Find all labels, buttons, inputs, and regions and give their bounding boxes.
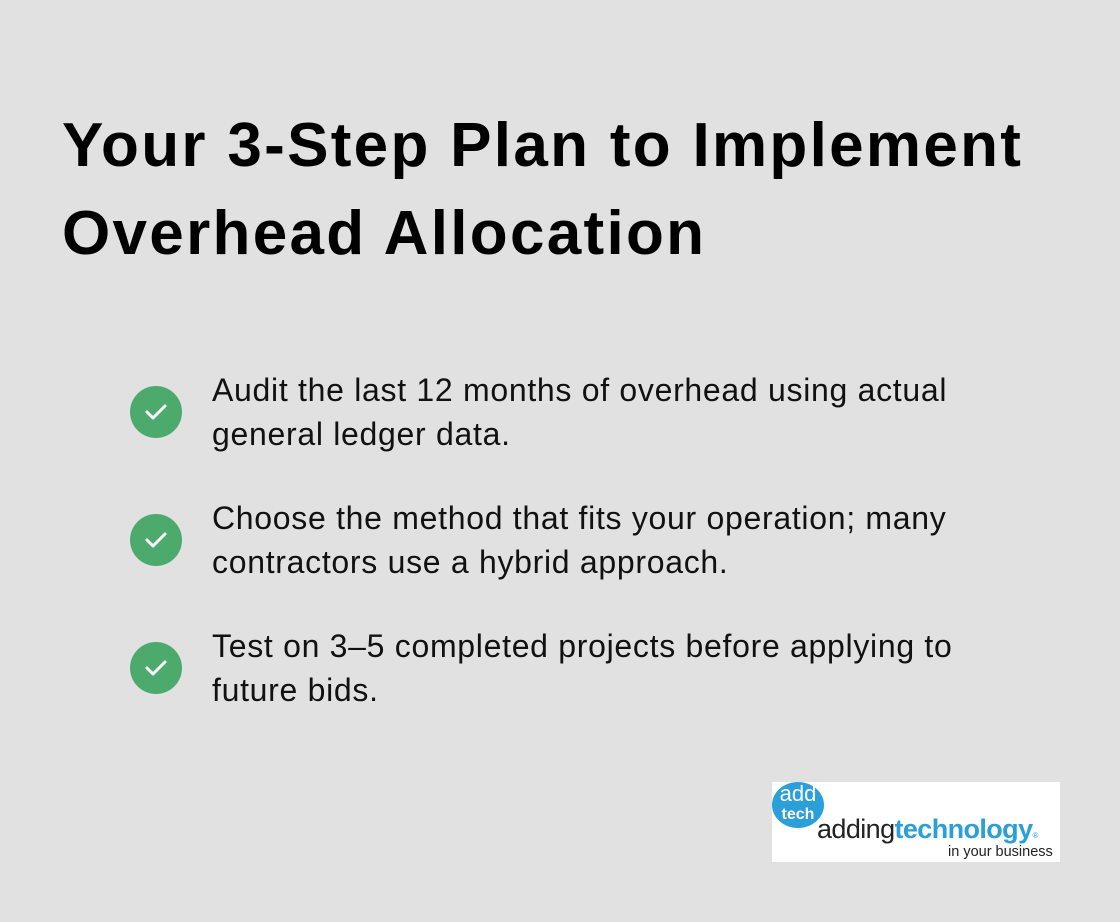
icon: check (130, 642, 182, 694)
item 1 (130, 372, 947, 452)
text 2: Choose the method that fits your operation; many (212, 500, 946, 536)
text 3 (212, 628, 953, 708)
text 2 (212, 500, 946, 580)
logo (772, 782, 1060, 862)
text 2: contractors use a hybrid approach. (212, 544, 729, 580)
item 2 (130, 500, 946, 580)
icon: check (130, 386, 182, 438)
title: Overhead Allocation (62, 199, 706, 268)
icon: check (130, 514, 182, 566)
logo circle: tech (782, 806, 814, 823)
text 1: Audit the last 12 months of overhead using actual (212, 372, 947, 408)
logo: in your business (948, 844, 1053, 860)
logo text: addingtechnology® (817, 814, 1038, 844)
text 3: Test on 3–5 completed projects before applying to (212, 628, 953, 664)
item 3 (130, 628, 953, 708)
text 1 (212, 372, 947, 452)
title: Your 3-Step Plan to Implement (62, 111, 1023, 180)
title (62, 111, 1023, 268)
logo circle (772, 782, 824, 828)
text 1: general ledger data. (212, 416, 511, 452)
logo circle: add (780, 781, 816, 806)
text 3: future bids. (212, 672, 379, 708)
